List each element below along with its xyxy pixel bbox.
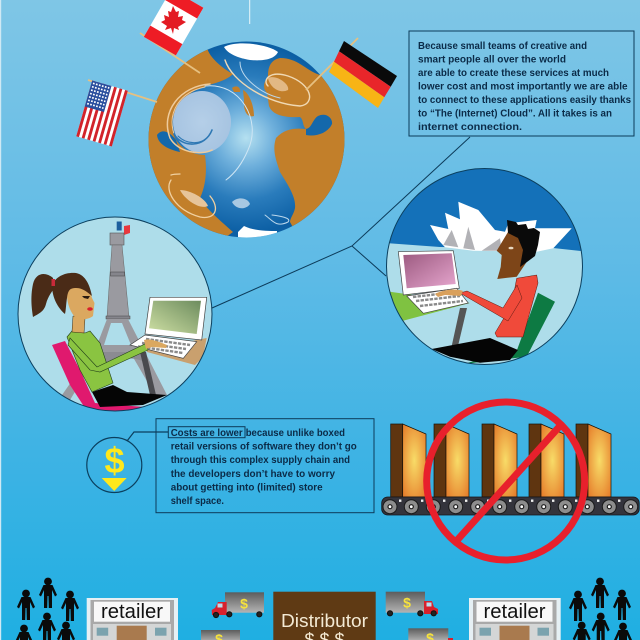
land: east [264,58,344,226]
hand [144,339,167,349]
hair tie [52,279,55,286]
truck right lower [408,628,453,640]
flag: Germany [306,38,397,108]
islands [243,90,254,116]
dollar label: $ [240,596,248,612]
chair [52,341,145,412]
flag pole: Germany [306,38,358,90]
top connector line [249,0,251,24]
globe [148,42,344,238]
desk [389,292,470,321]
maple leaf [161,6,186,34]
sky [390,169,581,251]
pale disc [173,91,231,153]
shirt [495,275,538,337]
windows and door [480,628,491,636]
customers left [15,578,79,640]
left edge strip [0,0,1,640]
eye [508,247,514,249]
trousers [432,338,518,363]
dollar sign: $ [104,440,125,481]
windows and door [97,628,108,636]
desk leg [452,308,467,346]
callout: services text [409,31,634,136]
trousers [92,385,167,407]
arm [68,338,148,372]
ponytail [31,274,54,317]
icon: falling dollar [87,432,168,492]
truck left lower [201,630,240,640]
retailer right [469,598,561,640]
boxes [391,424,611,497]
arm [460,285,522,321]
dollar label: $ [403,594,411,610]
flag: USA [76,80,157,146]
portrait: woman in Paris [18,217,212,412]
callout: costs are lower [156,419,374,513]
distributor label: Distributor [281,611,368,631]
laptop [398,251,468,313]
rollers [383,500,638,514]
hair [507,220,540,267]
hand [435,290,463,297]
face [497,232,528,279]
down arrow [102,478,127,491]
retailer label: retailer [101,601,163,623]
roller hubs [388,505,633,509]
truck right upper [386,592,438,616]
truck left upper [212,592,264,618]
land: west [148,50,233,236]
face [67,286,94,319]
belt studs [399,500,620,502]
eye [82,296,90,299]
callout: services text: lower cost and most importantly we are able [418,82,628,92]
desk leg [140,352,156,395]
callout: costs are lower: retail versions of software they don’t go [171,442,357,453]
laptop [130,297,207,358]
highlight box [168,427,245,438]
callout: costs are lower: about getting into (limited) store [171,482,323,493]
cloud swirls [180,190,208,207]
retailer left [87,598,178,640]
inland sea [306,115,332,136]
hair [52,273,92,314]
callout: costs are lower: shelf space. [171,496,224,507]
flag pole: USA [88,80,157,102]
customers right [569,578,632,640]
Sydney opera house [430,202,572,252]
conveyor belt of boxed software [382,424,639,515]
neck [72,316,85,333]
distributor box [273,592,376,640]
retailer label: retailer [484,601,546,623]
prohibition sign [427,402,585,560]
icon connector [127,432,168,441]
callout: costs are lower: Costs are lower [171,428,243,439]
callout: services text: to “The (Internet) Cloud”. All it takes is an [418,108,612,120]
swirl lines [167,60,310,224]
Eiffel tower [62,222,167,400]
callout: services text: to connect to these applications easily thanks [418,95,631,106]
flag: Canada [140,0,203,73]
lips [87,307,93,311]
callout: costs are lower: through this complex supply chain and [171,455,350,466]
desk [147,338,207,365]
callout: services text: internet connection. [418,122,522,133]
callout: costs are lower: because unlike boxed [246,428,345,439]
ice caps [224,43,278,60]
torso [67,331,113,392]
chair [463,293,555,364]
callout: services text: smart people all over the world [418,54,566,66]
connector lines between callout and portraits [212,137,470,308]
callout: services text: are able to create these services at much [418,68,609,79]
flag pole: Canada [140,33,200,73]
belt [382,497,639,515]
portrait: man in Sydney [380,160,590,364]
callout: services text: Because small teams of creative and [418,41,587,52]
callout: costs are lower: the developers don’t have to worry [171,469,335,480]
